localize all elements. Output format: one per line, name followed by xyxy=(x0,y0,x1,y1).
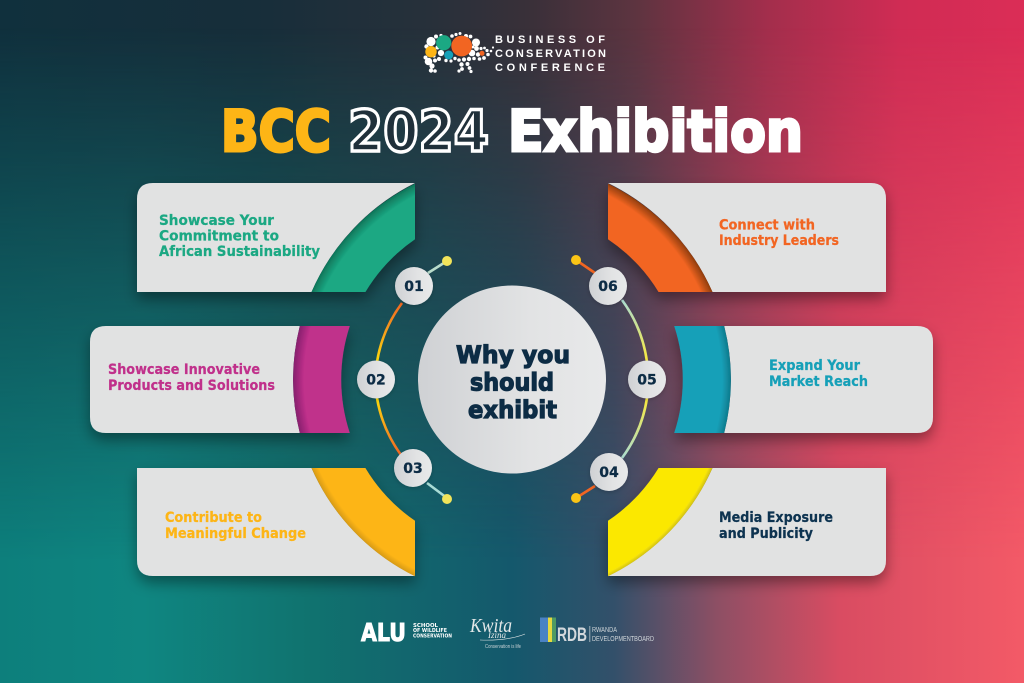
badge 04 xyxy=(590,453,628,491)
badge 03: 03 xyxy=(403,461,423,477)
panel: 01 sustainability xyxy=(137,183,415,292)
text: benefit 3: Meaningful Change xyxy=(165,526,306,542)
text: benefit 5: Market Reach xyxy=(769,374,868,390)
panel: 06 industry leaders xyxy=(608,183,886,292)
text: benefit 4: and Publicity xyxy=(719,526,814,542)
text: benefit 2: Products and Solutions xyxy=(108,378,275,394)
logo wordmark: CONSERVATION xyxy=(495,48,606,60)
badge 01: 01 xyxy=(404,279,424,295)
badge 02 xyxy=(357,360,395,398)
logo: ALU School of Wildlife Conservation: ALU xyxy=(361,618,406,647)
logo: Rwanda Development Board: DEVELOPMENTBOARD xyxy=(592,634,654,643)
panel: 05 market reach xyxy=(674,326,933,433)
logo: ALU School of Wildlife Conservation: CONSERVATION xyxy=(413,634,452,640)
text: benefit 6: Connect with xyxy=(719,218,815,234)
badge 04: 04 xyxy=(599,465,619,481)
center circle: why you should exhibit: exhibit xyxy=(468,396,557,424)
connector: 06 to dot xyxy=(571,255,595,273)
logo wordmark: CONFERENCE xyxy=(495,62,605,74)
logo: Kwita Izina: Izina xyxy=(487,630,506,640)
badge 06 xyxy=(589,267,627,305)
logo: ALU School of Wildlife Conservation xyxy=(361,618,452,647)
panel: 02 innovative products xyxy=(90,326,350,433)
logo: Rwanda Development Board xyxy=(540,618,654,646)
logo: Kwita Izina: Conservation is life xyxy=(485,644,521,650)
text: benefit 4 xyxy=(719,510,833,542)
text: benefit 3 xyxy=(165,510,306,542)
text: benefit 6: Industry Leaders xyxy=(719,233,839,249)
title: 2024 xyxy=(348,99,489,165)
icon: rhino made of circles xyxy=(424,32,494,73)
text: benefit 1: Commitment to xyxy=(159,228,279,244)
title: BCC xyxy=(221,99,331,165)
logo: Business of Conservation Conference xyxy=(424,32,606,74)
badge 03 xyxy=(394,449,432,487)
center circle: why you should exhibit: Why you xyxy=(456,341,570,369)
logo: Rwanda Development Board: RWANDA xyxy=(592,625,617,634)
text: benefit 3: Contribute to xyxy=(165,510,262,526)
logo: Kwita Izina: Kwita xyxy=(469,615,512,637)
connector: 01 to dot xyxy=(428,256,452,273)
text: benefit 2 xyxy=(108,362,275,394)
logo wordmark xyxy=(495,34,606,74)
ring connector arcs xyxy=(377,300,647,458)
logo: ALU School of Wildlife Conservation: OF WILDLIFE xyxy=(413,628,448,634)
badge 05 xyxy=(628,360,666,398)
text: benefit 4: Media Exposure xyxy=(719,510,833,526)
connector: 04 to dot xyxy=(571,486,595,503)
logo: Rwanda Development Board: RDB xyxy=(557,625,587,646)
badge 06: 06 xyxy=(598,279,618,295)
badge 02: 02 xyxy=(366,372,386,388)
title xyxy=(221,99,803,165)
badge 05: 05 xyxy=(637,372,657,388)
logo: ALU School of Wildlife Conservation: SCHOOL xyxy=(413,623,439,629)
text: benefit 1: Showcase Your xyxy=(159,213,275,229)
logo: Kwita Izina xyxy=(469,615,525,650)
text: benefit 5: Expand Your xyxy=(769,358,861,374)
text: benefit 2: Showcase Innovative xyxy=(108,362,260,378)
text: benefit 1 xyxy=(159,213,321,260)
panel: 04 media exposure xyxy=(608,468,886,576)
title: Exhibition xyxy=(508,99,803,165)
center circle: why you should exhibit: should xyxy=(470,368,554,396)
badge 01 xyxy=(395,267,433,305)
text: benefit 6 xyxy=(719,218,839,249)
center circle: why you should exhibit xyxy=(418,286,606,474)
text: benefit 5 xyxy=(769,358,868,390)
panel: 03 meaningful change xyxy=(137,468,415,576)
logo wordmark: BUSINESS OF xyxy=(495,34,605,46)
text: benefit 1: African Sustainability xyxy=(159,244,321,260)
connector: 03 to dot xyxy=(427,483,452,504)
